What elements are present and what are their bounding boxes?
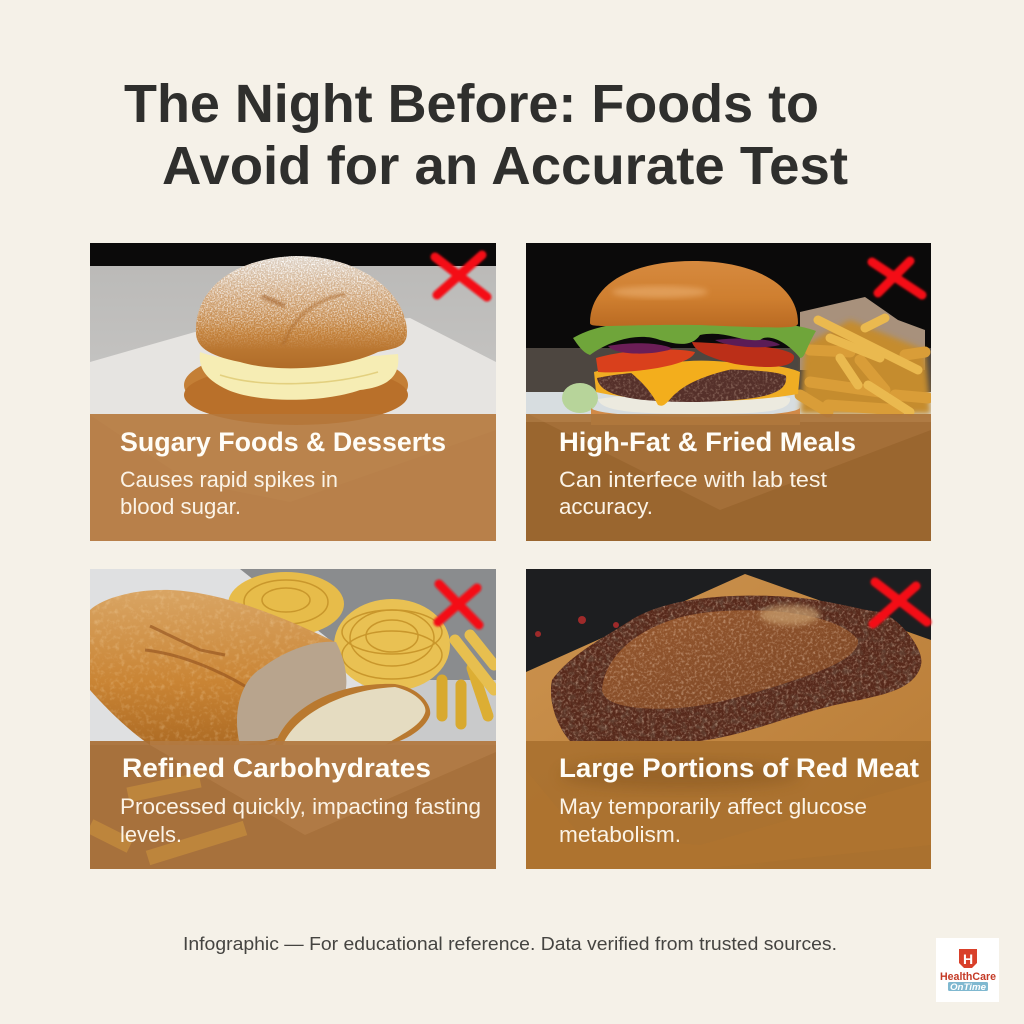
card description [559,794,867,847]
text overlay band [526,741,931,869]
title [124,74,848,196]
card description: May temporarily affect glucose [559,794,867,819]
photo: cheeseburger and fries [526,243,931,541]
card heading: Sugary Foods & Desserts [120,427,446,457]
card description: accuracy. [559,494,653,519]
card description: levels. [120,822,182,847]
icon: red x [873,582,927,624]
panel: sugary foods and desserts [90,243,496,541]
logo: HealthCare OnTime: H [963,951,973,967]
card description: Processed quickly, impacting fasting [120,794,481,819]
logo: HealthCare OnTime: OnTime [950,982,987,993]
icon: red x [872,261,922,295]
card description: Can interfece with lab test [559,467,828,492]
card description [559,467,828,519]
panel: refined carbohydrates [90,569,496,869]
text overlay band [90,414,496,541]
card heading: Large Portions of Red Meat [559,753,919,783]
icon: red x [435,255,487,297]
title: Avoid for an Accurate Test [162,136,848,196]
title: The Night Before: Foods to [124,74,819,134]
logo: HealthCare OnTime: HealthCare [940,971,996,983]
card heading: High-Fat & Fried Meals [559,427,856,457]
card heading: Refined Carbohydrates [122,753,431,783]
icon: red x [438,584,479,625]
card description: Causes rapid spikes in [120,467,338,492]
card description: blood sugar. [120,494,241,519]
photo: bread loaf and pasta [90,569,496,745]
logo: HealthCare OnTime [936,938,999,1002]
text overlay band [526,414,931,541]
photo: steak on wooden board [526,569,931,869]
card description: metabolism. [559,822,681,847]
text overlay band [90,741,496,869]
footer note: Infographic — For educational reference. Data verified from trusted sources. [183,934,837,954]
card description [120,794,481,847]
card description [120,467,338,519]
panel: large portions of red meat [526,569,931,869]
photo: cream puff dessert [90,243,496,425]
panel: high-fat and fried meals [526,243,931,541]
